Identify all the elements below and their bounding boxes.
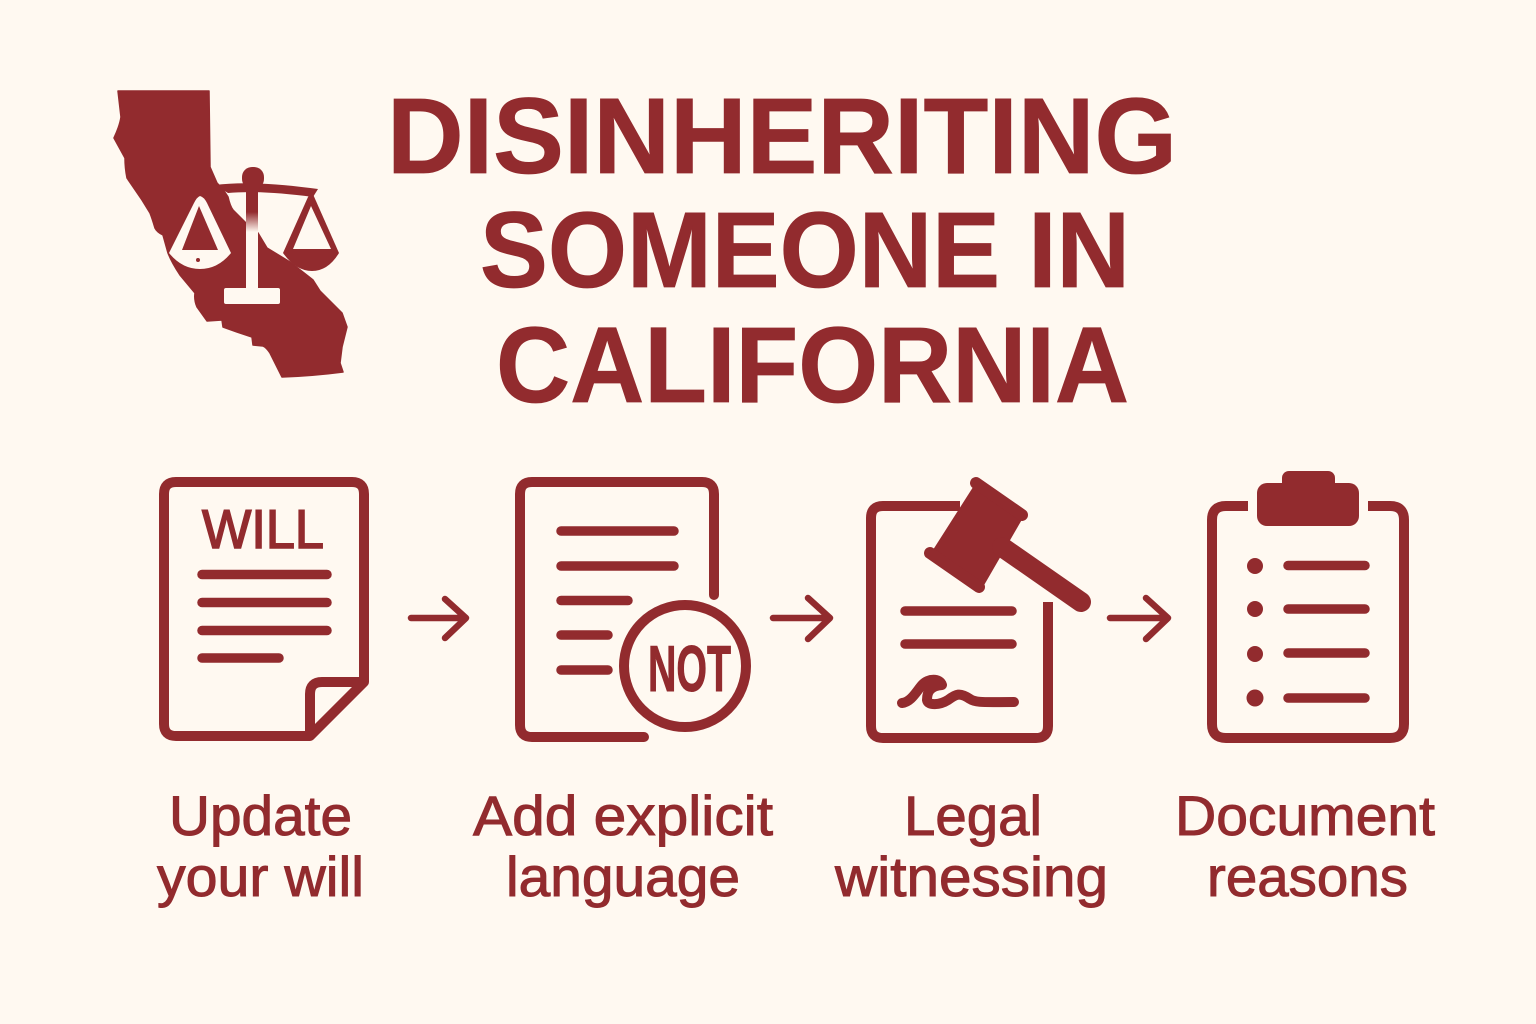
icon: will document [164,482,364,736]
label: document reasons: reasons [1207,845,1408,908]
clipboard clip [1257,471,1359,526]
NOT stamp circle [624,605,746,727]
title line 3: CALIFORNIA [496,304,1129,425]
label: update your will: Update [169,784,352,847]
text lines [905,611,1012,644]
label: add explicit language: language [506,845,740,908]
icon: document with gavel and signature [871,483,1081,738]
WILL label: WILL [202,498,324,560]
scale stem [246,186,258,290]
label: add explicit language [473,784,773,908]
page outline [871,506,1048,738]
signature [902,680,1014,704]
scale beam [215,183,318,197]
title line 2: SOMEONE IN [480,189,1130,310]
label: update your will: your will [157,845,364,908]
label: legal witnessing: witnessing [834,845,1108,908]
page outline with folded corner [164,482,364,736]
left scale pan [169,196,231,269]
arrow 1 [411,599,466,638]
title [387,75,1177,425]
label: add explicit language: Add explicit [473,784,773,847]
label: legal witnessing [834,784,1108,908]
gavel [930,483,1081,602]
checklist lines [1288,566,1365,698]
label: update your will [157,784,364,908]
arrow 3 [1110,598,1168,639]
clipboard outline [1212,506,1404,738]
label: legal witnessing: Legal [904,784,1042,847]
label: document reasons [1175,784,1435,908]
NOT text: NOT [648,632,731,705]
icon: clipboard checklist [1212,471,1404,738]
text lines [202,574,327,658]
text lines [561,531,674,670]
scale base [224,288,280,304]
label: document reasons: Document [1175,784,1435,847]
California silhouette [114,91,347,377]
arrow 2 [773,598,830,639]
title line 1: DISINHERITING [387,75,1177,196]
checklist bullets [1246,558,1264,706]
scale knob [242,167,264,189]
page outline [520,482,714,737]
right scale pan [283,192,339,271]
icon: document with NOT stamp [520,482,746,737]
icon: California map with scales of justice [114,91,347,377]
